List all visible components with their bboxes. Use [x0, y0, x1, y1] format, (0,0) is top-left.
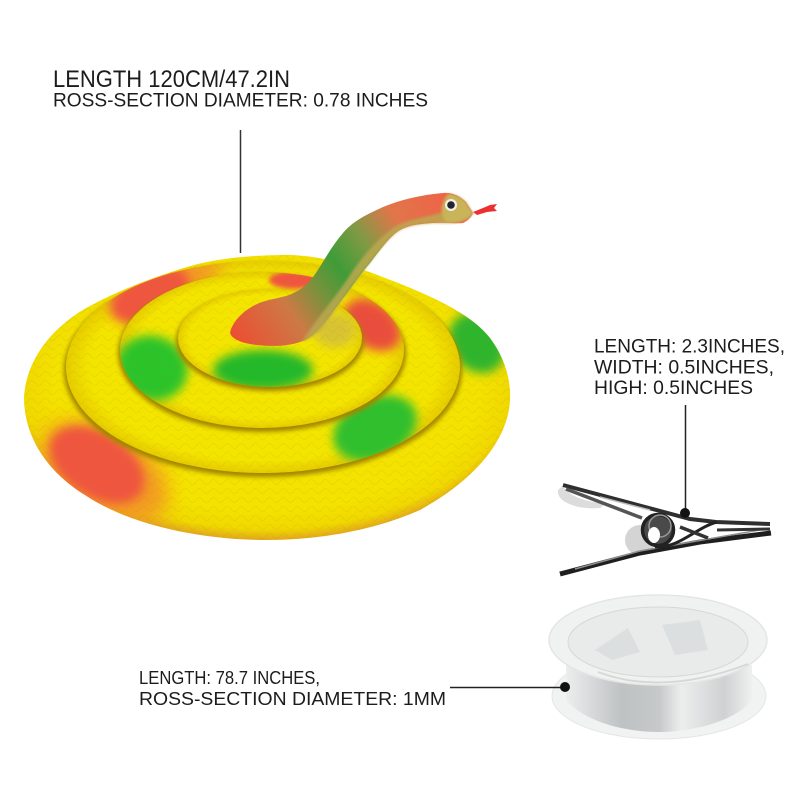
eye [445, 199, 457, 211]
scale texture [24, 255, 510, 540]
snake toy illustration [23, 193, 517, 545]
inner coil [176, 289, 364, 391]
outer coil [23, 255, 517, 545]
leader line: clip [680, 405, 690, 518]
tongue [473, 204, 497, 215]
infographic canvas [24, 70, 784, 740]
text block: spool dimensions [139, 668, 446, 709]
head snout [442, 194, 473, 223]
clip shadow [558, 486, 655, 555]
spool body [566, 665, 752, 732]
spool lower flange [552, 653, 766, 739]
text block: clip dimensions: WIDTH: 0.5INCHES, [594, 358, 774, 378]
neck underside [302, 210, 473, 342]
second coil [64, 238, 462, 477]
metal clip illustration [558, 485, 771, 574]
text block: clip dimensions [594, 336, 785, 399]
heading: snake dimensions: LENGTH 120CM/47.2IN [53, 66, 290, 93]
clip spring [642, 514, 717, 547]
leader line: snake [240, 130, 242, 253]
text block: clip dimensions: HIGH: 0.5INCHES [594, 378, 753, 399]
leader line: spool [450, 682, 570, 692]
heading: snake dimensions [53, 66, 428, 112]
clip upper arm [563, 485, 770, 524]
text block: spool dimensions: ROSS-SECTION DIAMETER: 1MM [139, 689, 446, 709]
third coil [107, 271, 411, 432]
heading: snake dimensions: ROSS-SECTION DIAMETER: 0.78 INCHES [53, 90, 428, 112]
neck and head [230, 193, 473, 346]
text block: clip dimensions: LENGTH: 2.3INCHES, [594, 336, 785, 358]
clear fishing line spool [549, 595, 767, 739]
spool upper flange [549, 595, 767, 685]
text block: spool dimensions: LENGTH: 78.7 INCHES, [139, 668, 320, 688]
clip lower arm [560, 533, 771, 574]
